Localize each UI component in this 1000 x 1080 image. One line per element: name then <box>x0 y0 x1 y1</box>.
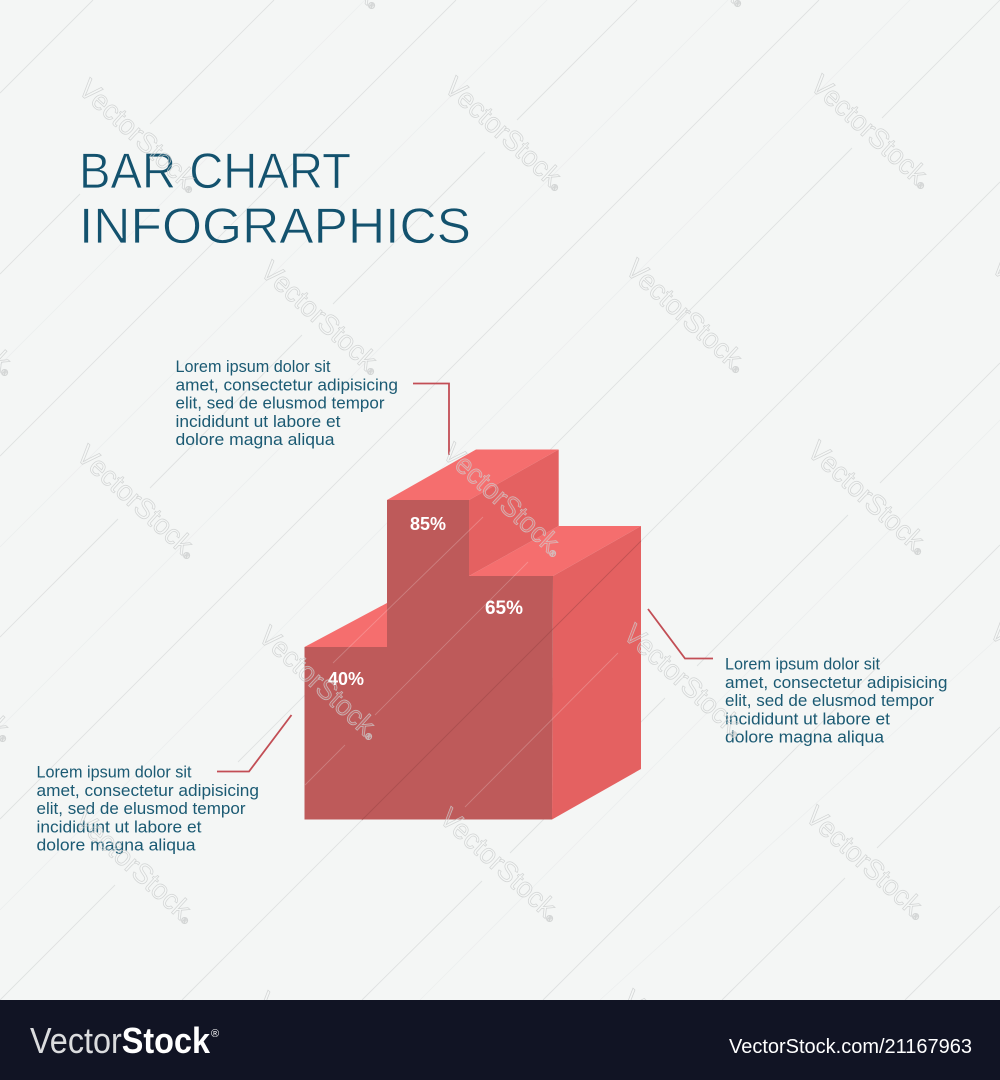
watermarks: VectorStock® <box>434 802 567 928</box>
footer image id: VectorStock.com/21167963 <box>729 1036 972 1058</box>
label: 40%: 40% <box>328 669 364 689</box>
text block: right callout: Lorem ipsum dolor sit <box>725 656 880 674</box>
text block: left callout: Lorem ipsum dolor sit <box>36 764 192 782</box>
watermarks: VectorStock® <box>437 437 570 563</box>
text block: top callout: dolore magna aliqua <box>176 431 335 449</box>
label: 65%: 65% <box>485 598 523 619</box>
footer logo: VectorStock <box>30 1020 211 1061</box>
watermarks: VectorStock® <box>618 618 751 744</box>
column side faces <box>469 450 641 820</box>
text block: top callout: Lorem ipsum dolor sit <box>176 358 331 376</box>
watermarks: VectorStock® <box>620 253 753 379</box>
text block: right callout: dolore magna aliqua <box>725 729 885 747</box>
leader line: left callout <box>217 715 292 772</box>
text block: left callout: dolore magna aliqua <box>36 837 196 855</box>
bar chart: stepped 3D columns <box>304 450 641 820</box>
footer band <box>0 1000 1000 1080</box>
label: 85%: 85% <box>410 514 446 534</box>
title: INFOGRAPHICS <box>79 198 471 254</box>
watermarks: VectorStock® <box>73 73 206 199</box>
text block: top callout: elit, sed de elusmod tempor <box>176 395 385 413</box>
watermarks: VectorStock® <box>805 69 938 195</box>
footer registered mark: ® <box>211 1028 219 1040</box>
text block: left callout: amet, consectetur adipisicing <box>36 782 259 800</box>
text block: top callout: incididunt ut labore et <box>176 413 341 431</box>
watermarks: VectorStock® <box>253 620 386 746</box>
text block: left callout <box>36 764 259 855</box>
text block: top callout: amet, consectetur adipisicing <box>176 376 398 394</box>
text block: right callout <box>725 656 948 747</box>
watermarks: VectorStock® <box>69 804 202 930</box>
title: BAR CHART <box>79 143 351 199</box>
watermarks: VectorStock® <box>802 435 935 561</box>
title <box>79 143 471 254</box>
watermarks: VectorStock® <box>255 255 388 381</box>
column top faces <box>304 450 641 647</box>
watermarks: VectorStock® <box>71 439 204 565</box>
text block: right callout: incididunt ut labore et <box>725 710 890 728</box>
leader line: top callout <box>413 384 449 455</box>
text block: right callout: elit, sed de elusmod tempor <box>725 692 935 710</box>
watermarks: VectorStock® <box>439 71 572 197</box>
text block: left callout: incididunt ut labore et <box>36 818 202 836</box>
text block: left callout: elit, sed de elusmod tempor <box>36 800 246 818</box>
watermarks: VectorStock® <box>800 800 933 926</box>
column front face <box>304 500 553 820</box>
text block: top callout <box>176 358 398 449</box>
text block: right callout: amet, consectetur adipisicing <box>725 674 948 692</box>
leader line: right callout <box>648 609 713 658</box>
